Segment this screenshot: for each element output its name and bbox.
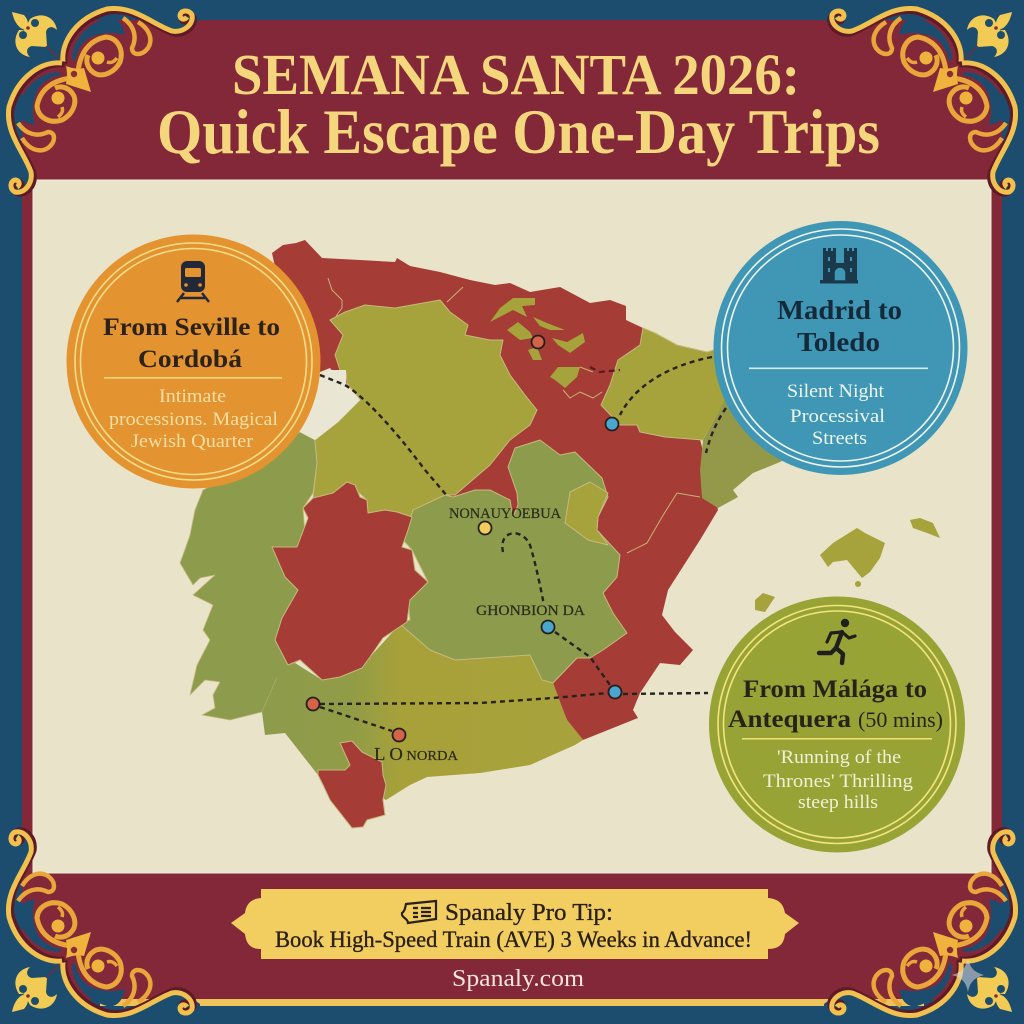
- map panel: cream background: [33, 180, 991, 873]
- heading: Toledo: [797, 327, 880, 357]
- text: description: Streets: [812, 428, 867, 449]
- map labels: GHONBION DA: [476, 603, 585, 619]
- title: Quick Escape One-Day Trips: [157, 96, 880, 167]
- region: Cadiz red: [318, 741, 386, 828]
- map of Spain: [180, 240, 940, 828]
- region: Extremadura red: [272, 482, 428, 680]
- islands: [755, 518, 940, 612]
- text: tip: Book High-Speed Train (AVE) 3 Weeks in Advance!: [275, 927, 752, 952]
- text: description: Jewish Quarter: [131, 431, 254, 452]
- heading: [103, 314, 280, 373]
- text: description: [763, 747, 914, 813]
- website: Spanaly.com: [452, 966, 584, 992]
- icon: runner: [819, 619, 855, 663]
- map labels: NONAUYOEBUA: [449, 506, 561, 522]
- region: Castilla olive: [313, 300, 537, 518]
- heading: Cordobá: [138, 346, 243, 373]
- region: central sage: [400, 440, 627, 683]
- region: northern olive patches: [490, 298, 585, 388]
- heading: [728, 676, 943, 733]
- text: description: processions. Magical: [109, 409, 278, 430]
- heading: (50 mins): [858, 707, 943, 732]
- text: description: Intimate: [159, 386, 226, 407]
- region: Catalonia sage: [700, 400, 800, 508]
- map labels: L O NORDA: [374, 744, 459, 764]
- bottom gold line: [100, 999, 924, 1006]
- text: description: 'Running of the: [777, 747, 901, 768]
- text: description: steep hills: [798, 792, 878, 813]
- region: olive blob: [565, 482, 608, 545]
- corner ornament: top right: [824, 0, 1024, 200]
- corner ornament: bottom left: [0, 824, 200, 1024]
- region borders: [328, 278, 700, 553]
- icon: castle: [820, 248, 858, 284]
- icon: train: [177, 261, 209, 302]
- heading: Antequera: [728, 706, 852, 733]
- title: [157, 42, 880, 167]
- text: description: [787, 381, 885, 449]
- text: description: [109, 386, 278, 452]
- route markers: [306, 336, 622, 742]
- watermark star: [952, 958, 984, 992]
- icon: ticket: [402, 901, 436, 923]
- region: Portugal: [180, 432, 317, 720]
- map labels: [374, 506, 585, 764]
- region: Andalucia: [262, 624, 583, 800]
- heading: [777, 295, 902, 357]
- heading: From Málága to: [743, 676, 927, 703]
- heading: Madrid to: [777, 295, 902, 325]
- region: northern and eastern red: [272, 240, 718, 740]
- hole in map: [300, 370, 360, 440]
- text: description: Silent Night: [787, 381, 885, 402]
- heading: From Seville to: [103, 314, 280, 341]
- dashed routes: [320, 357, 726, 731]
- region: Aragon olive: [601, 328, 740, 440]
- panel: Malaga to Antequera: [709, 596, 965, 852]
- panel: Madrid to Toledo: [714, 221, 968, 475]
- text: tip: Spanaly Pro Tip:: [445, 900, 613, 926]
- text: description: Processival: [790, 406, 885, 427]
- title: SEMANA SANTA 2026:: [232, 42, 800, 107]
- text: description: Thrones' Thrilling: [763, 771, 914, 792]
- corner ornament: top left: [0, 0, 200, 200]
- panel: Seville to Cordoba: [66, 234, 320, 488]
- corner ornament: bottom right: [824, 824, 1024, 1024]
- dark marks: [590, 367, 620, 372]
- text: tip: [275, 900, 752, 952]
- banner: pro tip: [231, 889, 799, 959]
